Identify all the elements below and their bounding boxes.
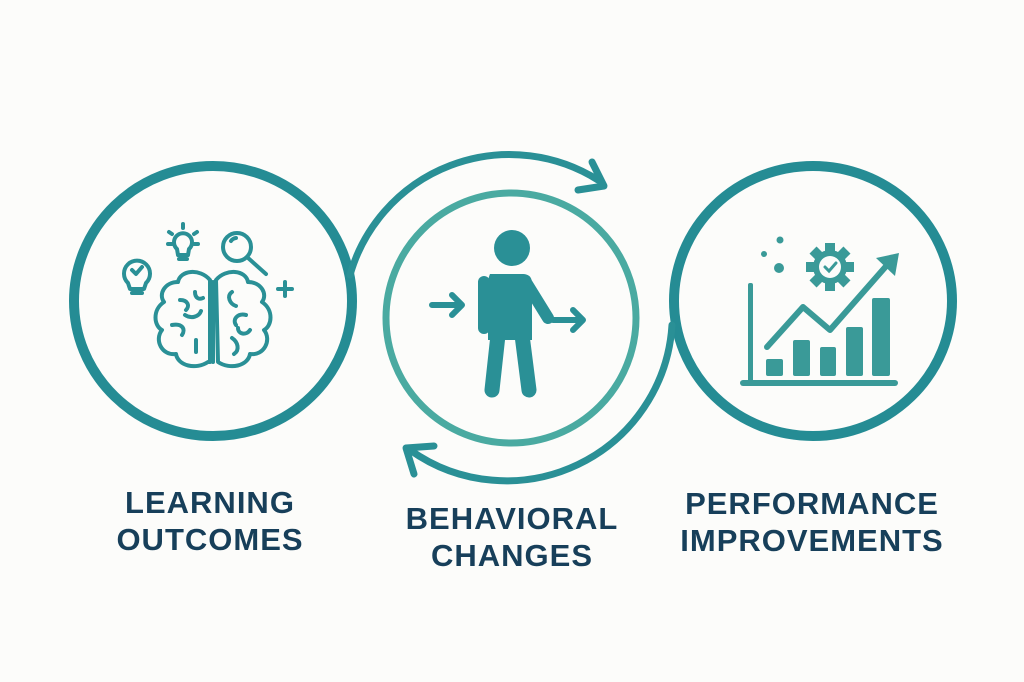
arrow: bottom cycle arc xyxy=(406,325,672,481)
label: learning outcomes: LEARNING xyxy=(125,485,295,520)
icon: brain with ideas xyxy=(124,224,292,366)
label: behavioral changes: BEHAVIORAL xyxy=(406,501,618,536)
icon: magnifier xyxy=(223,233,266,274)
circle: learning outcomes xyxy=(74,166,352,436)
label: learning outcomes: OUTCOMES xyxy=(116,522,304,557)
circle: performance improvements xyxy=(674,166,952,436)
label: performance improvements: PERFORMANCE xyxy=(685,486,939,521)
arrow: top cycle arc xyxy=(350,155,604,275)
label: performance improvements xyxy=(680,486,944,558)
gear xyxy=(806,243,854,291)
icon: plus xyxy=(278,282,292,296)
label: behavioral changes xyxy=(406,501,618,573)
icon: lightbulb xyxy=(168,224,198,259)
circle: behavioral changes inner xyxy=(386,193,636,443)
icon: person with arrows xyxy=(432,230,583,390)
label: learning outcomes xyxy=(116,485,304,557)
icon: lightbulb check xyxy=(124,261,150,293)
brain xyxy=(156,272,270,366)
label: behavioral changes: CHANGES xyxy=(431,538,593,573)
icon: growth chart with gear xyxy=(740,236,899,386)
label: performance improvements: IMPROVEMENTS xyxy=(680,523,944,558)
